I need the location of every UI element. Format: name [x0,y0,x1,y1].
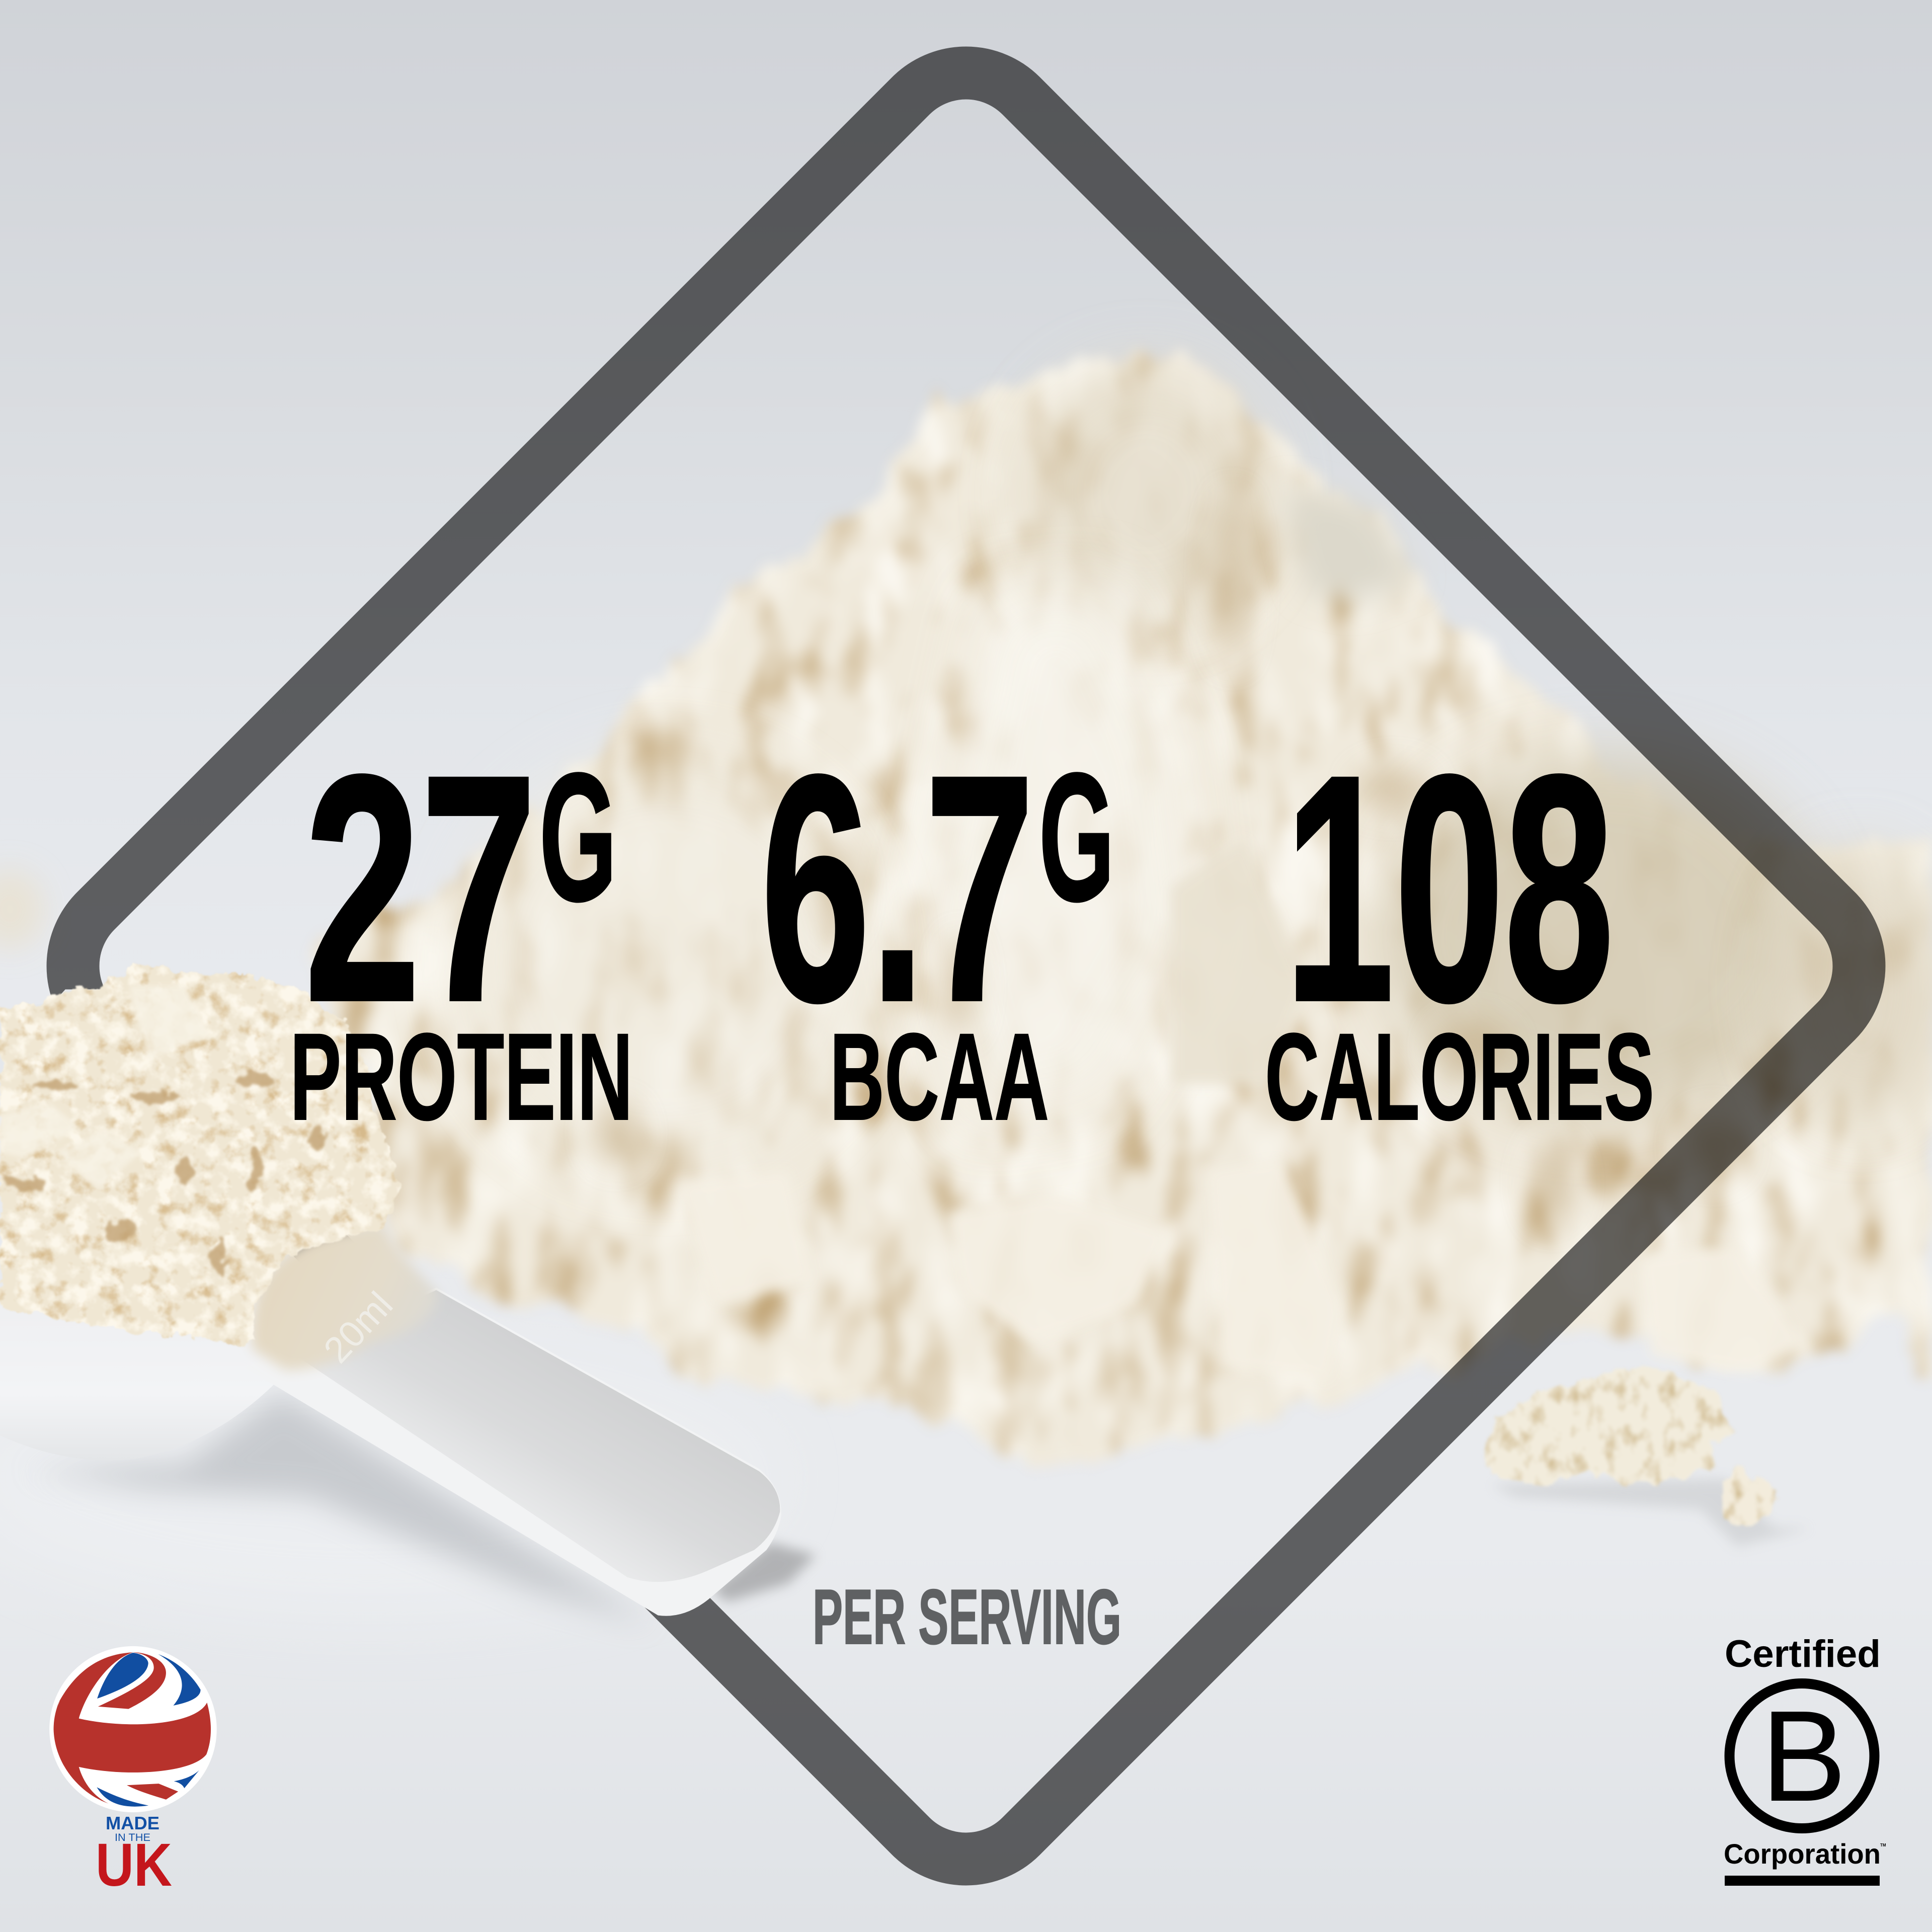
small shadow of crumbs [1491,1479,1811,1546]
scoop bowl [0,1294,281,1460]
bcaa label: BCAA [830,1008,1049,1146]
corporation: Corporation [1724,1838,1881,1870]
scoop ground shadow [25,1392,653,1624]
certified b corporation logo [1724,1633,1886,1886]
certified: Certified [1725,1633,1881,1675]
letter b: B [1761,1684,1846,1828]
left distant powder [0,870,44,949]
handle body [245,1287,781,1616]
27 value: 27 [304,708,537,1068]
embossed capacity mark: 20ml [315,1283,400,1371]
uk: UK [96,1830,172,1899]
per serving caption: PER SERVING [813,1573,1121,1660]
pile shading: warm shadow pockets [594,493,1742,1225]
scoop neck dusted with powder [252,1222,439,1370]
made: MADE [106,1813,159,1833]
pile shading: left pale slope [456,752,875,1171]
trademark: TM [1880,1843,1886,1847]
stat: 27g protein [290,708,633,1146]
g unit: G [539,735,617,939]
made in the uk badge [49,1646,217,1899]
underline bar [1725,1876,1880,1886]
6.7 value: 6.7 [761,708,1034,1068]
stat: 6.7g bcaa [761,708,1114,1146]
powder pile photo [0,351,1932,1614]
108 value: 108 [1284,708,1614,1068]
pile shading: grey boulder [1281,487,1417,604]
smooth powder facets [0,986,209,1189]
protein label: PROTEIN [290,1008,633,1146]
g unit: G [1039,735,1114,939]
handle top plane [296,1290,780,1582]
pile shading: right tan slope [1380,752,1824,1121]
handle tip shadow [712,1543,816,1602]
calories label: CALORIES [1265,1008,1654,1146]
pile shading: bright central ridge [912,579,1208,1134]
scooped powder mound [0,961,400,1343]
pile shading: far right edge [1775,850,1932,1121]
crumb chunk [1719,1469,1781,1525]
pile body [308,351,1932,1466]
crumb pile [1485,1367,1737,1485]
measuring scoop with powder [0,961,816,1624]
bright floor glow [0,1343,776,1614]
b circle [1730,1683,1875,1828]
pile shading: top peak [1023,363,1269,622]
pile shading: pale lower chunks [678,1158,1805,1380]
pile shading: smooth facet [1171,838,1306,1084]
globe flag icon [49,1646,217,1812]
stat: 108 calories [1265,708,1654,1146]
in the: IN THE [115,1832,150,1843]
powder crevices [5,1073,324,1271]
floor patch hiding frame behind scoop [0,990,173,1084]
